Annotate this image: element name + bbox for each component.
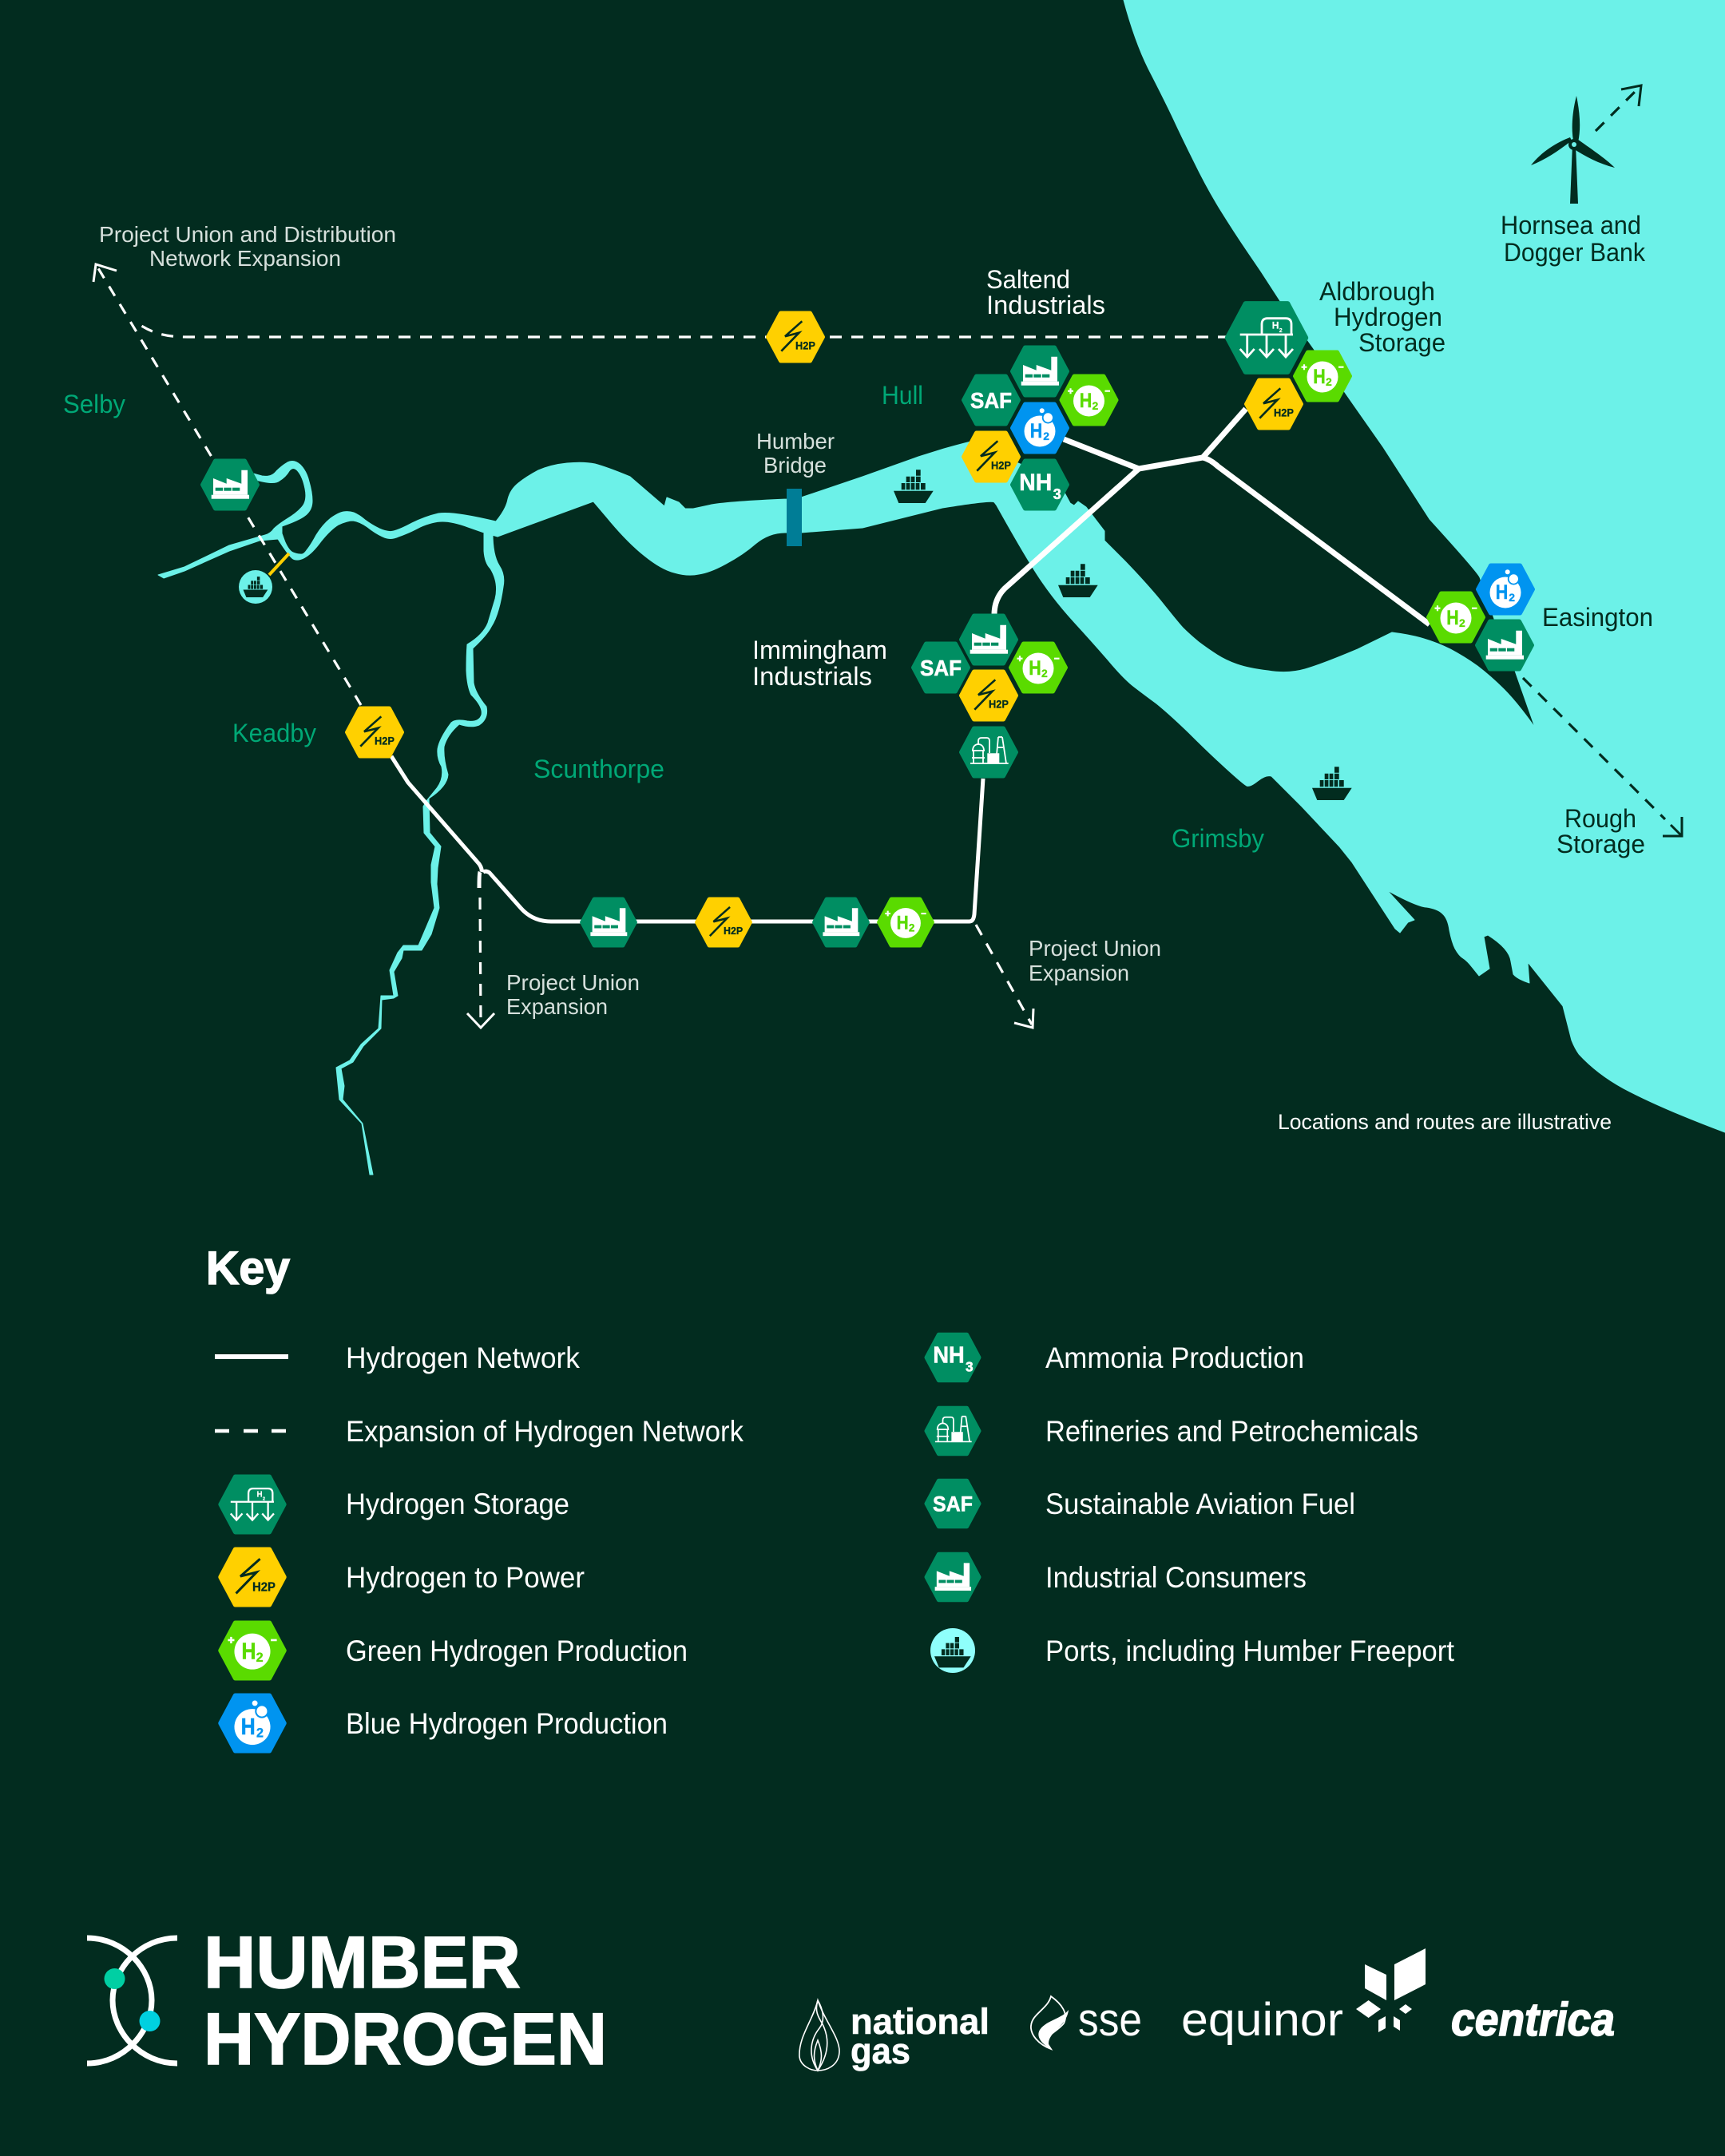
icon: SAF (914, 644, 968, 692)
logo: national gas (799, 2000, 989, 2071)
icon: H2P (697, 899, 750, 945)
label: Humber Bridge: Humber (756, 429, 835, 454)
icon: wind turbine (1531, 96, 1615, 204)
key text: Ports: Ports, including Humber Freeport (1045, 1635, 1455, 1667)
label: Keadby: Keadby (232, 719, 316, 747)
label: Project Union Expansion east: Project Union (1029, 936, 1161, 961)
key icon: SAF: SAF (933, 1492, 973, 1516)
key icon: H2P (220, 1549, 284, 1605)
key text: Ammonia Production: Ammonia Production (1045, 1342, 1304, 1374)
icon: blue hydrogen (1477, 565, 1533, 613)
key icon: ammonia (926, 1334, 979, 1381)
logo: centrica: centrica (1451, 1994, 1615, 2046)
expansion dashed routes (93, 264, 1230, 1028)
key icon: SAF (926, 1480, 979, 1527)
icon: blue hydrogen (1013, 404, 1067, 452)
icon: green hydrogen: 2 (1092, 399, 1099, 412)
key icon: ammonia: 3 (966, 1358, 974, 1374)
icon: green hydrogen: H (1080, 390, 1092, 412)
key icon: green hydrogen: 2 (256, 1651, 264, 1665)
label: Saltend Industrials: Industrials (986, 291, 1105, 319)
icon: green hydrogen (1011, 644, 1065, 692)
icon: H2P: H2P (989, 698, 1009, 710)
icon: blue hydrogen: 2 (1509, 591, 1515, 604)
icon: refinery (962, 728, 1016, 776)
icon: hydrogen storage (1227, 304, 1306, 371)
label: Saltend Industrials: Saltend (986, 265, 1070, 294)
icon: dashed route H2P (768, 313, 823, 361)
map labels (63, 211, 1653, 1134)
icon: H2P: H2P (1274, 406, 1294, 418)
Humber Bridge (787, 489, 802, 546)
icon: SAF (963, 376, 1019, 424)
cluster: Scunthorpe line (582, 899, 932, 945)
map (63, 0, 1725, 1175)
icon: green hydrogen: H (1029, 657, 1041, 680)
icon: Selby industrial (203, 461, 257, 509)
icon: green hydrogen: H (1446, 607, 1459, 629)
logo: SSE: sse (1078, 1994, 1142, 2046)
icon: H2P (1246, 380, 1302, 428)
icon: ship, Grimsby (1312, 767, 1352, 800)
key icon: H2P: H2P (252, 1581, 276, 1595)
label: Project Union Expansion west: Project Union (506, 970, 640, 995)
icon: port marker (239, 570, 272, 604)
key icon: ammonia: NH (933, 1343, 965, 1369)
key text: Hydrogen to Power: Hydrogen to Power (346, 1561, 585, 1594)
icon: SAF: SAF (970, 388, 1012, 413)
logo: national gas: gas (851, 2031, 910, 2071)
icon: green hydrogen: 2 (1041, 667, 1048, 680)
label: Aldbrough Hydrogen Storage: Hydrogen (1334, 303, 1442, 331)
footer logos (87, 1922, 1615, 2080)
key icon: hydrogen storage (220, 1476, 284, 1532)
icon: dashed route H2P: H2P (795, 339, 815, 351)
River Trent (336, 533, 504, 1175)
icon: green hydrogen: 2 (909, 922, 915, 934)
label: Project Union and Distribution: Project Union and Distribution (99, 222, 396, 247)
connector: port to Trent (269, 553, 289, 575)
icon: H2P (962, 672, 1016, 719)
icon: Keadby H2P: H2P (375, 735, 395, 747)
icon: green hydrogen: 2 (1459, 616, 1465, 629)
icon: ammonia: NH (1019, 470, 1052, 496)
icon: blue hydrogen: H (1030, 420, 1042, 442)
key text: Expansion: Expansion of Hydrogen Network (346, 1415, 744, 1448)
key text: Blue Hydrogen Production: Blue Hydrogen Production (346, 1707, 668, 1740)
icon: ammonia: 3 (1053, 486, 1061, 502)
label: Immingham Industrials: Immingham (752, 636, 887, 664)
note: illustrative: Locations and routes are illustrative (1278, 1110, 1612, 1134)
panel: key (206, 1242, 1455, 1751)
label: Aldbrough Hydrogen Storage: Aldbrough (1319, 277, 1435, 306)
label: Selby: Selby (63, 390, 125, 418)
key icon: hydrogen storage: 2 (263, 1496, 265, 1501)
icon: green hydrogen (1428, 593, 1484, 641)
key icon: refinery (926, 1408, 979, 1454)
label: Hull: Hull (882, 381, 923, 410)
icon: green hydrogen: 2 (1326, 375, 1332, 388)
logo: Humber Hydrogen mark (87, 1938, 177, 2063)
cluster: Immingham (914, 616, 1065, 776)
key text: Sustainable Aviation Fuel: Sustainable Aviation Fuel (1045, 1488, 1355, 1520)
logo: SSE (1031, 1994, 1142, 2049)
key icon: green hydrogen: H (241, 1639, 256, 1664)
icon: green hydrogen: H (1313, 366, 1326, 388)
key text: Industrial Consumers: Industrial Consumers (1045, 1561, 1307, 1594)
label: Project Union Expansion west: Expansion (506, 994, 608, 1019)
label: Hornsea and Dogger Bank: Hornsea and (1501, 211, 1641, 240)
label: Hornsea and Dogger Bank: Dogger Bank (1504, 238, 1646, 267)
key: hydrogen network line (215, 1354, 288, 1359)
key text: Hydrogen Storage: Hydrogen Storage (346, 1488, 569, 1520)
icon: H2P: H2P (991, 459, 1011, 471)
icon: industrial (582, 899, 635, 945)
cluster: Aldbrough (1227, 304, 1350, 428)
icon: hydrogen storage: H (1272, 319, 1279, 331)
icon: ammonia (1013, 461, 1067, 509)
key icon: blue hydrogen (220, 1695, 284, 1751)
icon: green hydrogen (1295, 352, 1350, 400)
label: Project Union Expansion east: Expansion (1029, 961, 1129, 985)
label: Humber Bridge: Bridge (763, 453, 827, 478)
label: Rough Storage: Storage (1556, 830, 1645, 858)
icon: hydrogen storage: 2 (1279, 328, 1283, 334)
heading: Key: Key (206, 1242, 290, 1294)
label: Immingham Industrials: Industrials (752, 662, 872, 691)
logo: equinor (1181, 1948, 1426, 2046)
dashed routes at sea (1523, 85, 1682, 836)
key icon: blue hydrogen: H (241, 1714, 256, 1740)
key icon: blue hydrogen: 2 (256, 1726, 264, 1740)
label: Easington: Easington (1542, 603, 1653, 632)
label: Rough Storage: Rough (1564, 804, 1636, 833)
key text: Hydrogen Network: Hydrogen Network (346, 1342, 580, 1374)
icon: ship, estuary (1058, 564, 1098, 597)
icon: blue hydrogen: H (1496, 581, 1508, 604)
hydrogen network lines (391, 409, 1430, 921)
key icon: hydrogen storage: H (256, 1490, 263, 1499)
icon: SAF: SAF (920, 656, 962, 680)
label: Scunthorpe: Scunthorpe (533, 755, 664, 783)
key icon: industrial (926, 1554, 979, 1600)
icon: ship, Hull (894, 470, 934, 503)
logo text: HYDROGEN: HYDROGEN (204, 1999, 607, 2080)
key icon: green hydrogen (220, 1623, 284, 1678)
logo text: HUMBER: HUMBER (204, 1922, 521, 2003)
cluster: Easington (1428, 565, 1533, 669)
key icon: port (930, 1628, 975, 1673)
icon: green hydrogen (879, 899, 932, 945)
icon: H2P: H2P (724, 925, 744, 937)
icon: H2P (963, 433, 1019, 481)
label: Grimsby: Grimsby (1172, 824, 1264, 853)
key text: Refineries: Refineries and Petrochemicals (1045, 1415, 1418, 1448)
icon: green hydrogen: H (897, 913, 909, 934)
sea and Humber estuary (158, 0, 1725, 1132)
key text: Green Hydrogen Production: Green Hydrogen Production (346, 1635, 688, 1667)
logo: equinor: equinor (1181, 1994, 1343, 2046)
icon: green hydrogen (1061, 376, 1116, 424)
icon: industrial (815, 899, 867, 945)
key: expansion dashed line (215, 1429, 286, 1433)
icon: blue hydrogen: 2 (1043, 430, 1049, 442)
label: Aldbrough Hydrogen Storage: Storage (1358, 328, 1445, 357)
icon: industrial (962, 616, 1016, 664)
logo: national gas: national (851, 2001, 989, 2042)
cluster: Hull and Saltend (963, 347, 1116, 509)
icon: industrial (1013, 347, 1067, 395)
icon: industrial (1477, 621, 1532, 669)
label: Network Expansion: Network Expansion (149, 246, 341, 271)
icon: Keadby H2P (347, 708, 402, 756)
